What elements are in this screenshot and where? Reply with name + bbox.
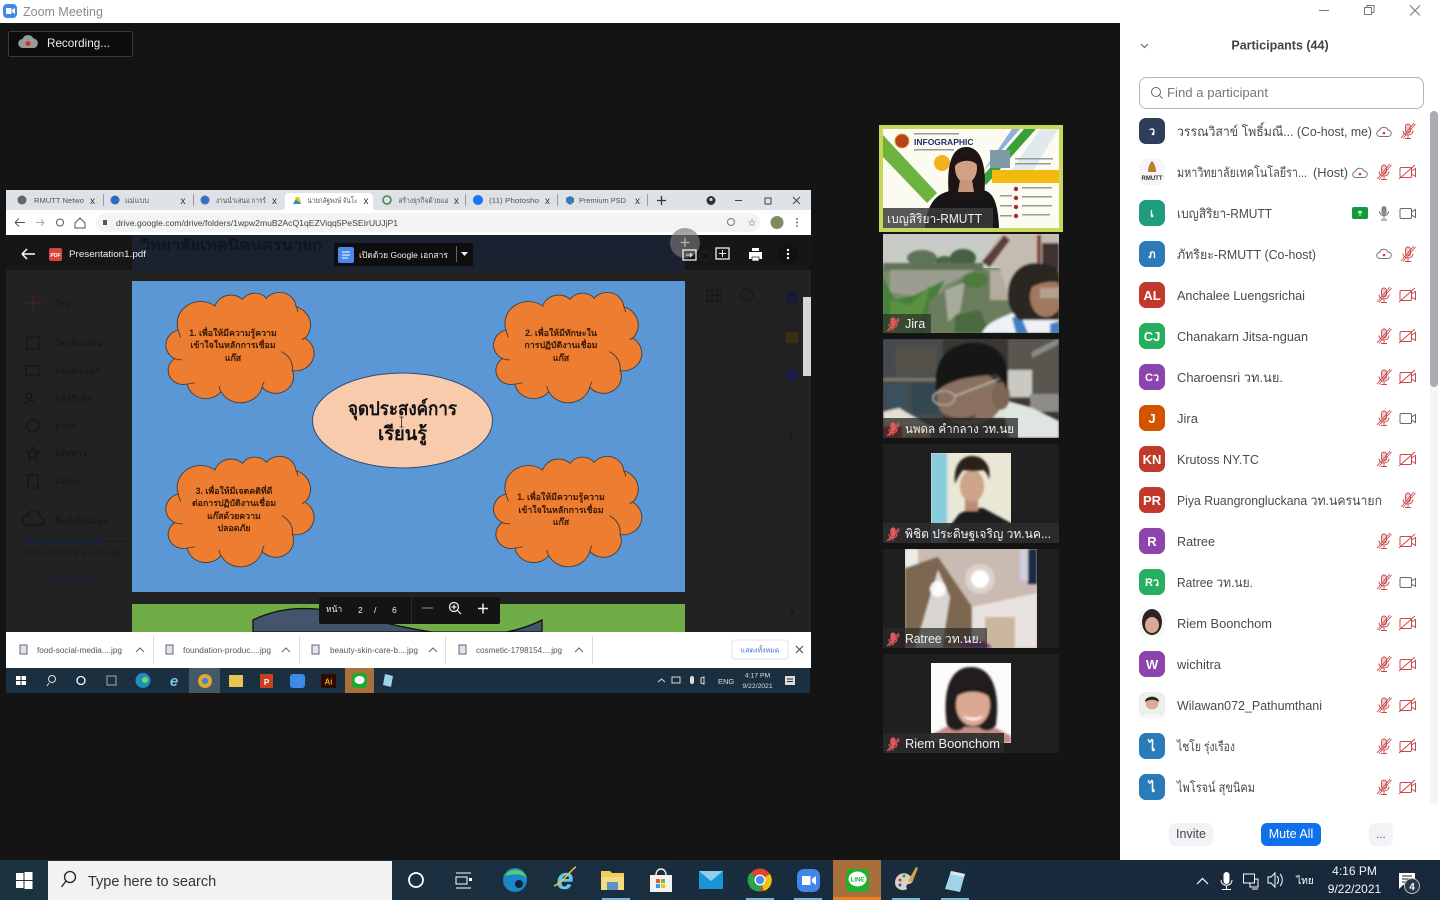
drive viewer dimmed background: ใหม่ — [55, 299, 70, 309]
pdf page toolbar: หน้า — [326, 604, 342, 614]
participant row: ไชโย รุ่งเรือง — [1176, 739, 1235, 755]
participant row: เบญสิริยา-RMUTT — [1177, 206, 1272, 221]
participant row — [1139, 159, 1416, 185]
participant row: (Host) — [1313, 165, 1348, 180]
scrollbar — [1430, 111, 1438, 805]
tab strip: แม่แบบ — [125, 196, 149, 205]
participant row: Anchalee Luengsrichai — [1177, 288, 1305, 303]
video tile: presenter: เบญสิริยา-RMUTT — [887, 212, 982, 226]
system tray: 9/22/2021 — [1328, 882, 1382, 896]
video tile: presenter — [879, 125, 1063, 232]
shared screen taskbar: Ai — [324, 678, 332, 686]
video tile: man with glasses: นพดล คำกลาง วท.นย — [905, 422, 1014, 436]
participant row — [1139, 528, 1416, 554]
pdf page toolbar: 6 — [392, 605, 397, 615]
tab strip: x — [180, 196, 186, 207]
participant row: ภ — [1148, 249, 1156, 261]
participant row: Wilawan072_Pathumthani — [1177, 698, 1322, 713]
cloud text 2: การปฏิบัติงานเชื่อม — [524, 338, 598, 350]
pdf page toolbar — [319, 597, 500, 624]
participants panel — [1120, 0, 1440, 860]
clouds — [166, 292, 642, 567]
participant row: PR — [1143, 493, 1162, 508]
start button — [16, 872, 32, 889]
tab strip: สร้างธุรกิจด้วยแอ — [398, 196, 448, 205]
participant row — [1139, 364, 1416, 390]
participant row: มหาวิทยาลัยเทคโนโลยีรา... — [1177, 165, 1307, 180]
participant row — [1139, 200, 1416, 226]
windows taskbar — [0, 860, 1440, 900]
shared screen taskbar: P — [264, 678, 270, 687]
tab strip: นายกลัฐพงษ์ จันโะ — [308, 196, 358, 205]
participant row — [1139, 282, 1416, 308]
participant row — [1139, 733, 1416, 759]
cloud text 2: 2. เพื่อให้มีทักษะใน — [525, 326, 597, 338]
drive viewer dimmed background — [6, 235, 811, 632]
pdf page toolbar: 2 — [358, 605, 363, 615]
scrollbar — [803, 297, 811, 376]
cloud text 2: แก๊ส — [553, 353, 570, 363]
cloud text 3: ต่อการปฏิบัติงานเชื่อม — [192, 496, 276, 508]
shared screen taskbar: 9/22/2021 — [742, 683, 773, 690]
button: invite: Invite — [1176, 827, 1206, 841]
button: invite — [1169, 823, 1213, 846]
participant row: Jira — [1177, 411, 1199, 426]
slide heading: จุดประสงค์การ — [348, 398, 458, 421]
system tray: ไทย — [1295, 875, 1314, 887]
shared screen taskbar: e — [170, 673, 178, 690]
drive viewer dimmed background: คอมพิวเตอร์ — [55, 366, 100, 376]
pdf viewer header: PDF — [50, 253, 60, 259]
participant row: RMUTT — [1142, 176, 1163, 182]
participant row: ภัทริยะ-RMUTT (Co-host) — [1177, 247, 1316, 262]
button: mute all: Mute All — [1269, 827, 1313, 841]
video tile: Ratree room — [883, 549, 1059, 648]
participant row: Rว — [1145, 577, 1159, 589]
address bar: ☆ — [748, 218, 757, 229]
participant row: CJ — [1144, 329, 1160, 344]
search box — [1140, 78, 1424, 108]
shared screen taskbar: ENG — [718, 677, 734, 686]
next slide preview — [132, 604, 685, 635]
participant row: Charoensri วท.นย. — [1177, 370, 1283, 385]
shared screen taskbar: 4:17 PM — [745, 672, 770, 680]
participant row — [1139, 774, 1416, 800]
participant row: wichitra — [1176, 657, 1222, 672]
system tray — [1197, 864, 1420, 896]
pdf page toolbar: / — [374, 605, 377, 615]
participant row: ไ — [1147, 738, 1156, 754]
cloud text 4: เข้าใจในหลักการเชื่อม — [518, 503, 604, 515]
drive viewer dimmed background: ถังขยะ — [55, 476, 80, 486]
download bar: food-social-media....jpg — [37, 646, 122, 655]
participant row — [1139, 692, 1416, 718]
video tile: Riem Boonchom: Riem Boonchom — [905, 737, 1000, 751]
video tile: presenter: INFOGRAPHIC — [914, 137, 974, 147]
video tile: profile photo man: พิชิต ประดิษฐเจริญ วท.นค... — [905, 527, 1051, 541]
tab strip: x — [272, 196, 277, 207]
participant row: Ratree — [1177, 534, 1215, 549]
slide 1: learning objectives — [132, 281, 685, 592]
tab strip: (11) Photosho — [489, 196, 539, 205]
tab strip — [6, 190, 811, 210]
participant row: เ — [1150, 208, 1154, 220]
participant row: ว — [1149, 126, 1155, 138]
drive viewer dimmed background: ล่าสุด — [55, 421, 76, 432]
panel header — [1141, 38, 1329, 52]
participant row: Krutoss NY.TC — [1177, 452, 1259, 467]
cloud text 4: 1. เพื่อให้มีความรู้ความ — [517, 490, 605, 503]
participant row: R — [1147, 534, 1157, 549]
taskbar icons: LINE — [851, 878, 864, 884]
cloud text 3: 3. เพื่อให้มีเจตคติที่ดี — [196, 484, 273, 496]
participant row: ไพโรจน์ สุขนิคม — [1176, 780, 1255, 796]
cloud text 3: ปลอดภัย — [218, 523, 250, 533]
pdf viewer header: Presentation1.pdf — [69, 249, 146, 260]
tab strip: Premium PSD — [579, 196, 627, 205]
drive viewer dimmed background: พื้นที่เก็บข้อมูล — [55, 515, 107, 527]
taskbar icons: e — [556, 861, 574, 896]
button: mute all — [1261, 823, 1321, 846]
participant row: Cว — [1145, 372, 1159, 384]
drive viewer dimmed background: วิทยาลัยเทคนิคนครนายก — [140, 236, 322, 254]
drive viewer dimmed background: แชร์กับฉัน — [55, 393, 93, 403]
video tile: Ratree room: Ratree วท.นย. — [905, 632, 982, 646]
cloud text 1: แก๊ส — [225, 353, 242, 363]
participant row: วรรณวิสาข์ โพธิ์มณี... (Co-host, me) — [1177, 122, 1372, 139]
participant row — [1139, 405, 1416, 431]
participant row: Ratree วท.นย. — [1177, 575, 1253, 590]
recording indicator: Recording... — [47, 36, 110, 50]
search box: Find a participant — [1167, 85, 1268, 100]
download bar: beauty-skin-care-b....jpg — [330, 646, 418, 655]
participant row — [1139, 241, 1416, 267]
tab strip: x — [364, 196, 368, 207]
participant row: Riem Boonchom — [1177, 616, 1272, 631]
centre ellipse — [312, 373, 492, 468]
participant row — [1139, 651, 1416, 677]
title bar: Zoom Meeting — [23, 5, 103, 19]
participant row: KN — [1143, 452, 1161, 467]
panel header: Participants (44) — [1231, 38, 1329, 52]
tab strip: x — [545, 196, 550, 207]
button: more — [1369, 823, 1393, 846]
drive viewer dimmed background: ใช้ไป 9.83 GB จาก 15 GB — [25, 548, 122, 558]
participant row — [1139, 118, 1416, 144]
cloud text 3: แก๊สด้วยความ — [207, 511, 261, 521]
window controls — [1319, 6, 1420, 16]
cloud text 4: แก๊ส — [553, 517, 570, 527]
drive viewer dimmed background: ไดรฟ์ของฉัน — [54, 338, 102, 348]
slide 1: learning objectives: เรียนรู้ — [378, 423, 428, 446]
video tile: man with glasses — [883, 338, 1059, 438]
shared screen taskbar — [6, 668, 810, 693]
address bar — [6, 210, 811, 235]
participant row — [1139, 609, 1416, 636]
download bar: cosmetic-1798154....jpg — [476, 646, 562, 655]
video tile: Jira — [883, 234, 1062, 333]
participant row: AL — [1143, 288, 1161, 303]
tab strip: RMUTT Netwo — [34, 196, 84, 205]
pdf viewer header: เปิดด้วย Google เอกสาร — [359, 250, 448, 260]
participant row — [1139, 323, 1416, 349]
participant row: Chanakarn Jitsa-nguan — [1177, 329, 1308, 344]
download bar: foundation-produc....jpg — [183, 646, 271, 655]
video tile: Jira: Jira — [905, 317, 925, 331]
system tray: 4:16 PM — [1332, 864, 1377, 878]
participant row: W — [1146, 657, 1159, 672]
system tray: 4 — [1409, 882, 1415, 893]
cloud text 1: 1. เพื่อให้มีความรู้ความ — [189, 326, 277, 339]
search box: Type here to search — [88, 874, 216, 890]
search box — [48, 861, 392, 900]
recording indicator — [8, 32, 132, 56]
video tile: Riem Boonchom — [883, 654, 1059, 753]
taskbar icons — [409, 860, 969, 900]
tab strip: x — [635, 196, 640, 207]
video tile: profile photo man — [883, 444, 1059, 543]
tab strip: x — [90, 196, 95, 207]
tab strip: x — [454, 196, 459, 207]
tab strip: งานนำเสนอ การร์ — [216, 196, 266, 205]
shared screen: browser window — [6, 190, 811, 693]
drive viewer dimmed background: ซื้อพื้นที่เก็บข้อมูล — [41, 575, 104, 587]
participant row: Piya Ruangrongluckana วท.นครนายก — [1177, 493, 1382, 508]
cloud text 1: เข้าใจในหลักการเชื่อม — [190, 338, 276, 350]
participant row — [1139, 446, 1416, 472]
participant row — [1139, 569, 1416, 595]
drive viewer dimmed background: ที่ติดดาว — [55, 447, 87, 458]
participant row — [1139, 487, 1416, 513]
address bar: drive.google.com/drive/folders/1wpw2muB2AcQ1qEZViqq5PeSEIrUUJjP1 — [116, 218, 398, 228]
participant row: J — [1148, 411, 1156, 426]
pdf viewer header — [22, 228, 798, 266]
button: more: ... — [1376, 829, 1386, 841]
title bar — [0, 0, 1120, 23]
participant row: ไ — [1147, 779, 1156, 795]
download bar — [6, 632, 811, 668]
download bar: แสดงทั้งหมด — [741, 644, 779, 654]
